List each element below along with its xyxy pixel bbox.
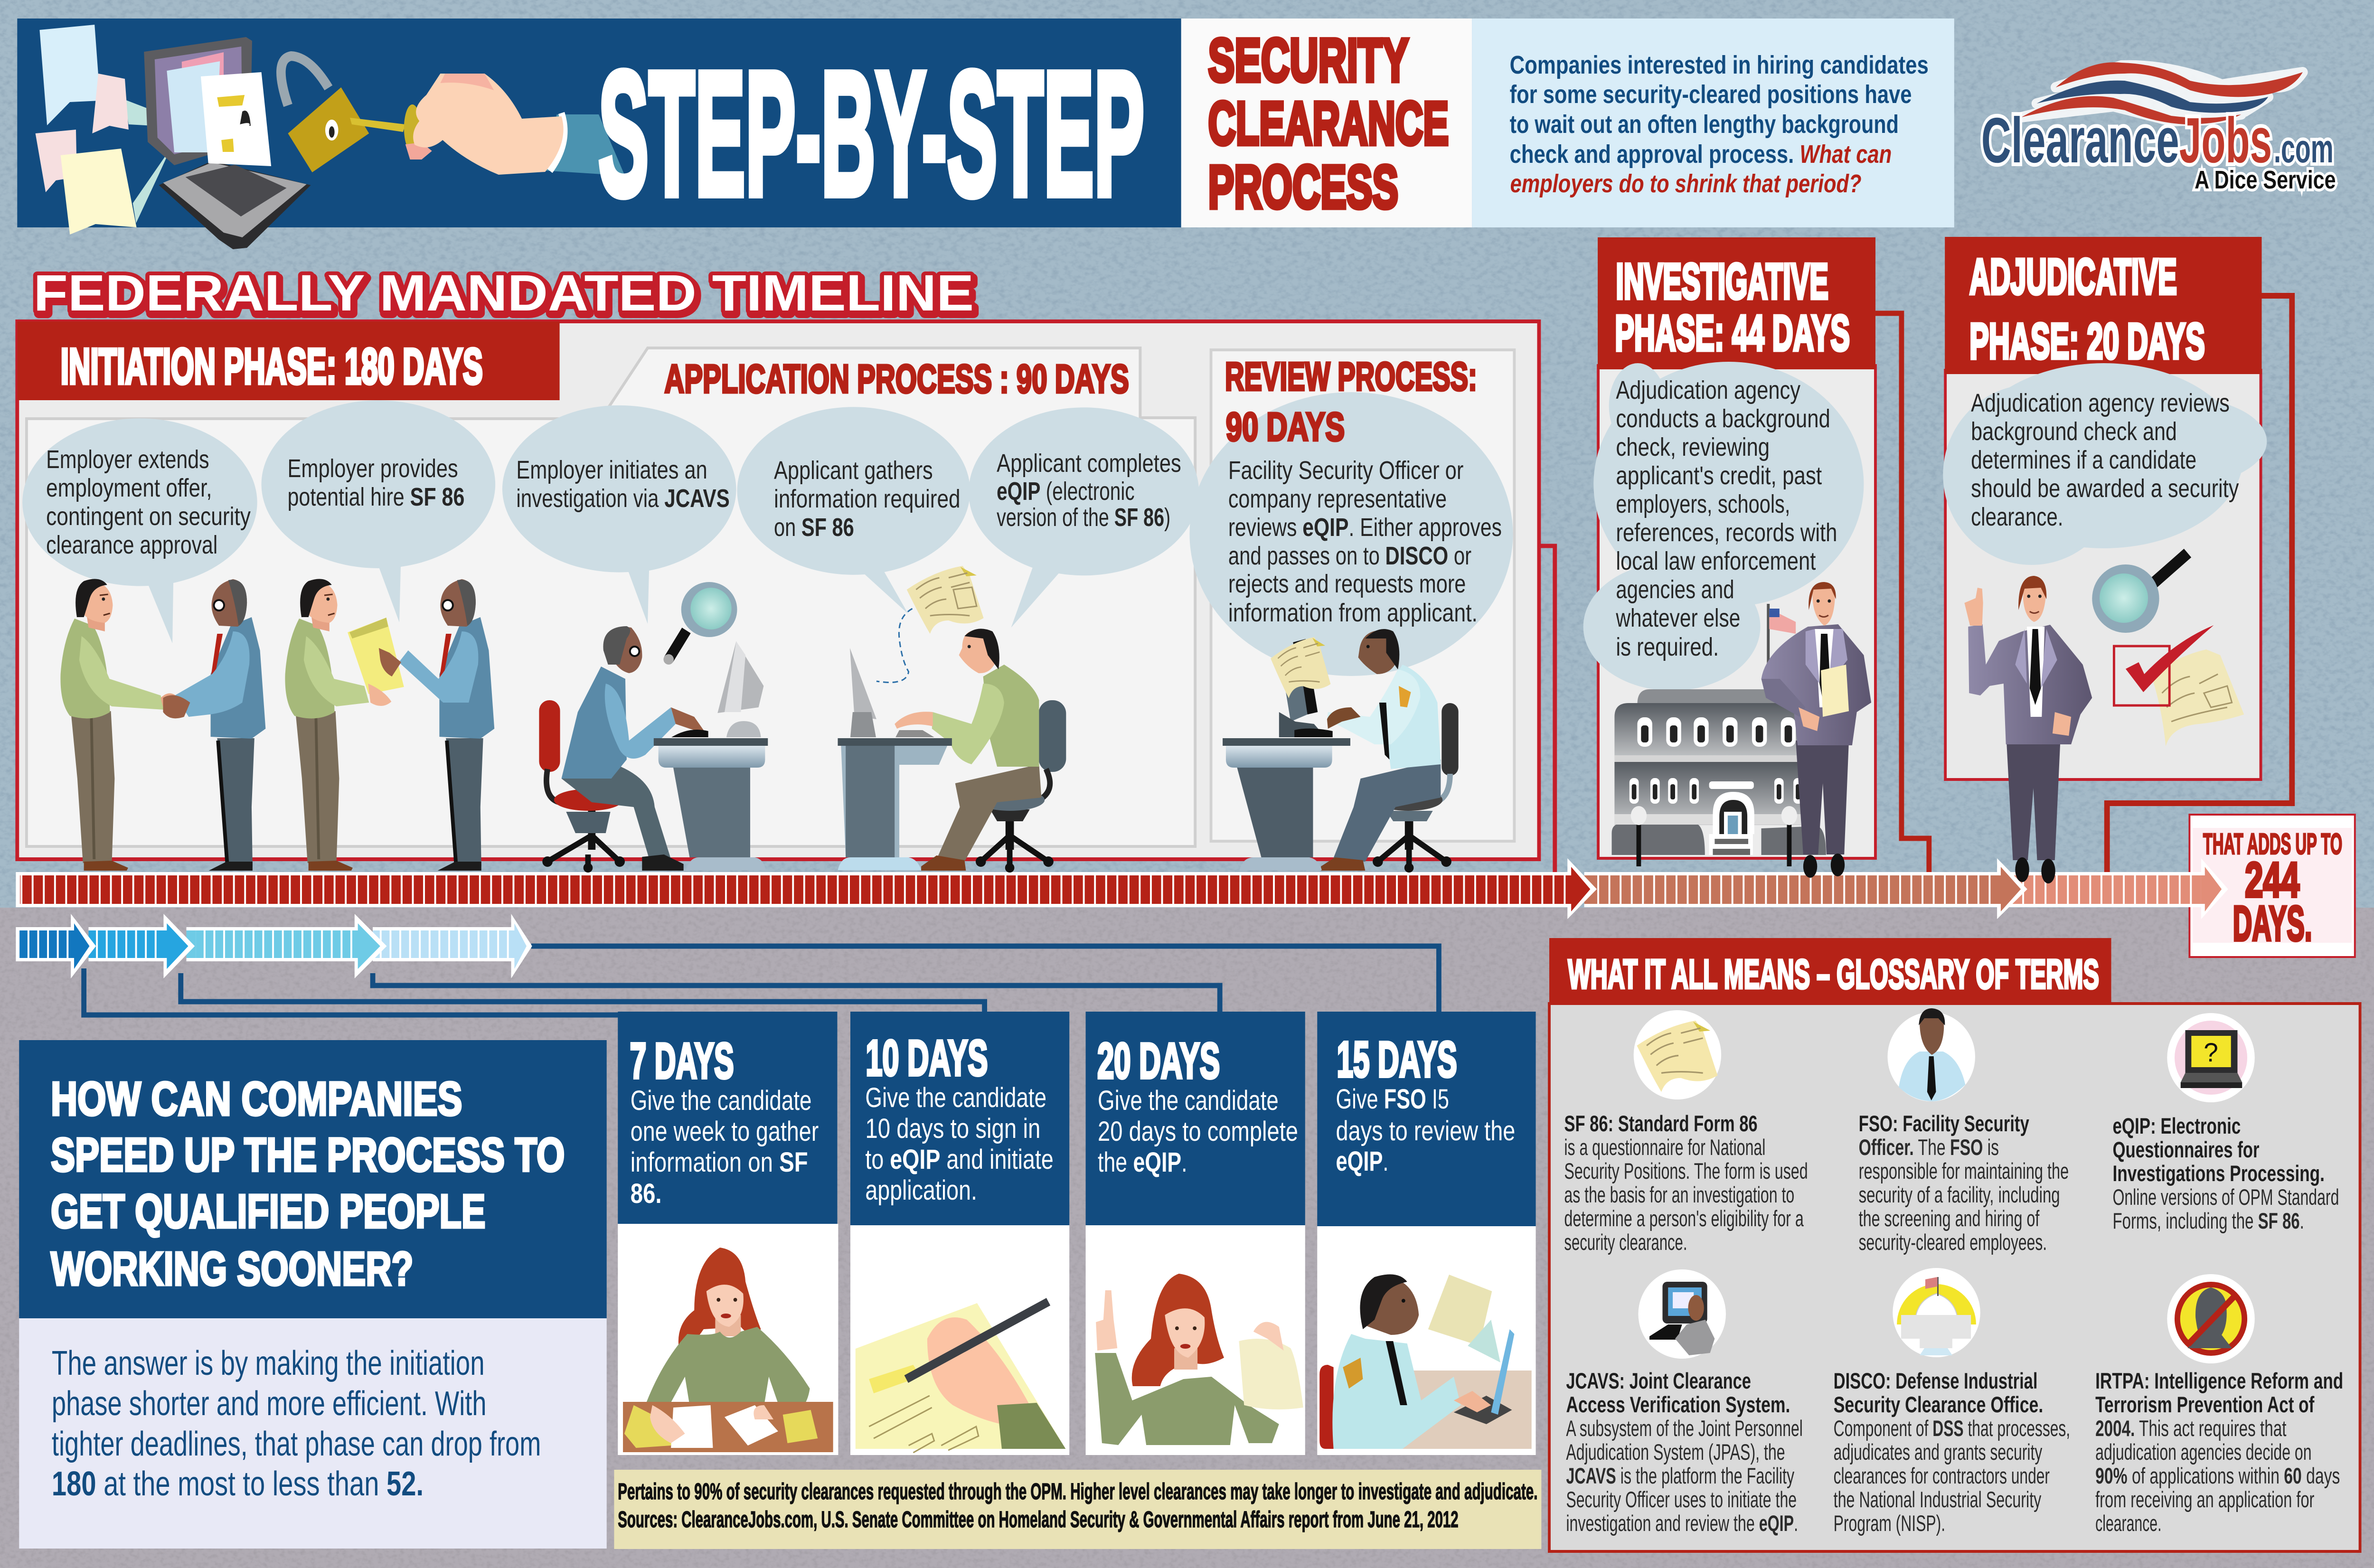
initiation phase heading: INITIATION PHASE: 180 DAYS (61, 338, 483, 394)
panel: investigative phase (1583, 237, 1875, 858)
arrow: 7 days (16, 914, 96, 978)
column: 10 days: to eQIP and initiate (865, 1145, 1054, 1175)
question heading: GET QUALIFIED PEOPLE (51, 1184, 486, 1238)
intro text: for some security-cleared positions have (1510, 81, 1912, 109)
icon: floating SF 86 document (907, 566, 984, 634)
adjudicative text (1971, 389, 2239, 531)
review process text: information from applicant. (1228, 599, 1478, 627)
glossary text: eQIP: Forms, including the SF 86. (2112, 1209, 2304, 1233)
panel: how can companies speed up (19, 1040, 607, 1549)
glossary text: JCAVS: A subsystem of the Joint Personnel (1566, 1416, 1803, 1441)
panel: glossary of terms (1549, 938, 2360, 1551)
glossary text: eQIP: eQIP: Electronic (2112, 1114, 2241, 1138)
logo: ClearanceJobs.com (1981, 62, 2336, 194)
investigative text: agencies and (1616, 576, 1734, 604)
column: 10 days (850, 1012, 1069, 1455)
review process heading: 90 DAYS (1226, 404, 1345, 449)
investigative text (1616, 376, 1837, 661)
connector line: investigative phase to timeline (1875, 313, 1929, 873)
icon: IRTPA no terrorism (2167, 1274, 2255, 1363)
investigative text: whatever else (1616, 604, 1740, 632)
timeline segment: initiation 180 days (16, 858, 1597, 919)
header intro panel (1472, 19, 1954, 227)
adjudicative text: should be awarded a security (1971, 475, 2239, 503)
glossary text: JCAVS: Access Verification System. (1566, 1392, 1790, 1417)
illustration: officer reviewing on laptop (1319, 1274, 1532, 1449)
icon: JCAVS workstation (1638, 1269, 1726, 1359)
dashed path: document to computer (876, 609, 912, 683)
column: 20 days: 20 DAYS (1097, 1033, 1220, 1089)
glossary text: JCAVS: investigation and review the eQIP. (1566, 1511, 1798, 1536)
adjudicative text: background check and (1971, 418, 2177, 446)
intro text: Companies interested in hiring candidates (1510, 51, 1929, 79)
investigative heading: PHASE: 44 DAYS (1615, 305, 1850, 361)
review process text (1228, 457, 1502, 627)
heading: security clearance process: CLEARANCE (1208, 89, 1449, 157)
figure: facility security officer at desk (1223, 629, 1459, 873)
intro text: employers do to shrink that period? (1510, 170, 1862, 198)
speech bubble: applicant gathers information (737, 407, 970, 614)
header white panel (1181, 19, 1472, 227)
initiation phase heading (17, 321, 560, 400)
speech bubble: applicant completes eQIP: Applicant completes (997, 450, 1181, 478)
figure: employer handshake (60, 579, 179, 871)
glossary text: IRTPA: 90% of applications within 60 days (2095, 1464, 2340, 1488)
glossary text: JCAVS: Adjudication System (JPAS), the (1566, 1440, 1785, 1465)
column: 10 days: application. (865, 1175, 977, 1206)
speech bubble: employer extends offer: Employer extends (46, 446, 209, 474)
arrow: 15 days (373, 914, 532, 978)
glossary text: DISCO: DISCO: Defense Industrial (1834, 1369, 2037, 1393)
intro text: check and approval process. What can (1510, 141, 1892, 169)
speech bubble: employer provides SF 86 (262, 400, 495, 622)
speech bubble: employer initiates investigation: investigation via JCAVS (516, 485, 730, 513)
section title: federally mandated timeline: FEDERALLY MANDATED TIMELINE (36, 267, 976, 324)
icon: magnifying glass (663, 582, 737, 665)
investigative text: check, reviewing (1616, 433, 1770, 461)
answer text: phase shorter and more efficient. With (52, 1384, 487, 1423)
figure: applicant at desk (838, 629, 1066, 873)
sources note (614, 1470, 1541, 1549)
question heading: SPEED UP THE PROCESS TO (51, 1128, 565, 1181)
review process panel (1211, 350, 1514, 841)
answer text (52, 1344, 541, 1503)
column: 15 days: days to review the (1336, 1116, 1515, 1146)
speech bubble: applicant completes eQIP (969, 407, 1199, 628)
speech bubble: employer initiates investigation (502, 405, 736, 624)
glossary text: JCAVS (1566, 1369, 1803, 1536)
investigative heading: INVESTIGATIVE (1616, 254, 1828, 310)
adjudicative text: clearance. (1971, 503, 2063, 531)
column: 10 days: 10 days to sign in (865, 1114, 1040, 1144)
sources note: Sources: ClearanceJobs.com, U.S. Senate Committee on Homeland Security & Governmental Affairs report from June 21, 2012 (618, 1507, 1459, 1532)
column: 15 days: eQIP. (1336, 1146, 1388, 1177)
speech bubble: applicant gathers information: Applicant gathers (774, 457, 933, 485)
glossary text: SF 86: determine a person's eligibility for a (1564, 1206, 1804, 1231)
section title: federally mandated timeline: FEDERALLY MANDATED TIMELINE (34, 264, 974, 321)
glossary text: DISCO: the National Industrial Security (1834, 1487, 2042, 1512)
investigative text: local law enforcement (1616, 547, 1816, 575)
glossary text: DISCO: Security Clearance Office. (1834, 1392, 2043, 1417)
glossary text: SF 86: SF 86: Standard Form 86 (1564, 1111, 1758, 1136)
timeline segment: investigative 44 days (1584, 858, 2027, 919)
investigative text: conducts a background (1616, 405, 1830, 433)
review process text: rejects and requests more (1228, 570, 1466, 598)
investigative heading (1598, 237, 1875, 369)
investigative text: is required. (1616, 633, 1719, 661)
glossary text: SF 86: security clearance. (1564, 1230, 1687, 1255)
column: 7 days: Give the candidate (631, 1086, 812, 1116)
header banner (17, 19, 2336, 249)
main timeline arrow bar (16, 858, 2228, 919)
illustration: woman with thumb up and form (1095, 1274, 1303, 1445)
timeline segment: adjudicative 20 days (2004, 858, 2228, 919)
question heading: HOW CAN COMPANIES (51, 1072, 462, 1125)
investigative text: employers, schools, (1616, 490, 1790, 518)
glossary text: FSO: security of a facility, including (1859, 1183, 2060, 1207)
glossary text: FSO: security-cleared employees. (1859, 1230, 2047, 1255)
panel: adjudicative phase (1943, 237, 2267, 779)
glossary text: FSO: the screening and hiring of (1859, 1206, 2039, 1231)
glossary text: JCAVS: Security Officer uses to initiate the (1566, 1487, 1797, 1512)
glossary text: SF 86 (1564, 1111, 1808, 1255)
adjudicative heading: PHASE: 20 DAYS (1969, 313, 2205, 369)
icon: facility security officer (1887, 1008, 1975, 1101)
callout: that adds up to 244 days: 244 (2245, 852, 2299, 907)
logo: ClearanceJobs.com: .com (2274, 126, 2334, 171)
speech bubble: applicant completes eQIP: version of the SF 86) (997, 504, 1170, 532)
column: 10 days: Give the candidate (865, 1083, 1046, 1113)
glossary text: SF 86: Security Positions. The form is used (1564, 1159, 1808, 1183)
review process heading: REVIEW PROCESS: (1225, 354, 1477, 399)
column: 20 days: the eQIP. (1098, 1147, 1187, 1178)
speech bubble: employer provides SF 86: potential hire SF 86 (287, 483, 464, 511)
column: 7 days: information on SF (631, 1147, 808, 1178)
intro text (1510, 51, 1929, 198)
intro text: to wait out an often lengthy background (1510, 111, 1899, 139)
speech bubble: applicant gathers information: information required (774, 485, 961, 513)
arrow: 20 days (187, 914, 387, 978)
glossary text: DISCO: adjudicates and grants security (1834, 1440, 2043, 1465)
blue connector lines (84, 946, 1439, 1015)
column: 20 days (1086, 1012, 1305, 1455)
glossary heading (1549, 938, 2111, 1004)
speech bubble: employer extends offer (22, 418, 257, 643)
review process text: reviews eQIP. Either approves (1228, 514, 1502, 542)
logo: ClearanceJobs.com: Clearance (1981, 105, 2179, 176)
header navy band (17, 19, 1181, 227)
icon: magnifying glass and approved document (2092, 553, 2244, 746)
investigative speech bubble (1583, 362, 1864, 691)
glossary text: SF 86: is a questionnaire for National (1564, 1135, 1765, 1160)
application process panel (27, 348, 1195, 846)
heading: security clearance process: SECURITY (1208, 26, 1409, 94)
illustration: woman sorting papers (623, 1248, 833, 1452)
adjudicative heading (1945, 237, 2261, 374)
column: 10 days: 10 DAYS (866, 1030, 988, 1086)
column: 7 days: 86. (631, 1179, 662, 1209)
icon: SF 86 form (1634, 1010, 1721, 1099)
figure: employer at desk (539, 626, 768, 873)
glossary text: JCAVS: JCAVS is the platform the Facility (1566, 1464, 1795, 1488)
figure: candidate receives folder (379, 579, 494, 871)
investigative text: references, records with (1616, 519, 1837, 547)
glossary text: FSO: Officer. The FSO is (1859, 1135, 1999, 1160)
glossary text: IRTPA (2095, 1369, 2343, 1536)
glossary text: IRTPA: Terrorism Prevention Act of (2095, 1392, 2315, 1417)
question heading (51, 1072, 565, 1295)
review process text: company representative (1228, 485, 1447, 513)
figure: investigator in purple suit (1762, 582, 1871, 878)
adjudicative heading: ADJUDICATIVE (1969, 249, 2177, 305)
connector line: initiation phase to timeline (1539, 546, 1555, 873)
speech bubble: applicant gathers information: on SF 86 (774, 514, 854, 542)
figure: candidate handshake (163, 579, 265, 871)
review process text: and passes on to DISCO or (1228, 542, 1471, 570)
question heading: WORKING SOONER? (51, 1242, 413, 1295)
logo: ClearanceJobs.com: A Dice Service (2195, 166, 2336, 194)
review process text: Facility Security Officer or (1228, 457, 1463, 485)
icon: eQIP laptop: ? (2204, 1038, 2218, 1067)
review process heading (1225, 354, 1477, 449)
logo: ClearanceJobs.com: Jobs (2179, 105, 2272, 176)
column: 7 days (618, 1012, 838, 1455)
adjudicative text: Adjudication agency reviews (1971, 389, 2230, 417)
glossary text: DISCO (1834, 1369, 2070, 1536)
icon: eQIP laptop (2167, 1013, 2255, 1102)
column: 20 days: Give the candidate (1098, 1086, 1279, 1116)
column: 7 days: one week to gather (631, 1117, 819, 1147)
glossary text: SF 86: as the basis for an investigation to (1564, 1183, 1794, 1207)
column: 15 days: Give FSO I5 (1336, 1084, 1449, 1115)
glossary text: FSO: FSO: Facility Security (1859, 1111, 2029, 1136)
glossary text: eQIP (2112, 1114, 2339, 1233)
speech bubble: review process (1189, 392, 1513, 676)
illustration: government building with flag (1612, 604, 1826, 866)
answer text: The answer is by making the initiation (52, 1344, 485, 1382)
short timeline arrow bar (16, 914, 532, 978)
glossary text: DISCO: Program (NISP). (1834, 1511, 1945, 1536)
column: 7 days: 7 DAYS (630, 1033, 734, 1089)
investigative text: Adjudication agency (1616, 376, 1800, 404)
connector line: adjudicative phase to timeline (2107, 296, 2292, 873)
speech bubble: employer extends offer: clearance approval (46, 531, 217, 559)
glossary text: FSO: responsible for maintaining the (1859, 1159, 2069, 1183)
glossary text: DISCO: clearances for contractors under (1834, 1464, 2050, 1488)
callout: that adds up to 244 days: DAYS. (2233, 896, 2312, 951)
glossary text: IRTPA: 2004. This act requires that (2095, 1416, 2287, 1441)
column: 15 days: 15 DAYS (1337, 1032, 1457, 1088)
speech bubble: employer extends offer: employment offer, (46, 474, 212, 502)
sources note: Pertains to 90% of security clearances requested through the OPM. Higher level clearances may take longer to investigate and adjudicate. (618, 1479, 1537, 1504)
speech bubble: applicant completes eQIP: eQIP (electronic (997, 478, 1135, 506)
illustration: hand signing form (856, 1302, 1065, 1453)
column: 20 days: 20 days to complete (1098, 1117, 1298, 1147)
glossary text: JCAVS: JCAVS: Joint Clearance (1566, 1369, 1751, 1393)
adjudicative text: determines if a candidate (1971, 446, 2196, 474)
callout: that adds up to 244 days (2189, 815, 2355, 957)
application process heading: APPLICATION PROCESS : 90 DAYS (664, 357, 1129, 401)
column: 15 days (1317, 1012, 1536, 1455)
arrow: 10 days (88, 914, 195, 978)
figure: employer hands over folder (285, 579, 404, 871)
glossary text: eQIP: Questionnaires for (2112, 1137, 2260, 1162)
panel: initiation phase (17, 321, 1539, 859)
speech bubble: employer initiates investigation: Employer initiates an (516, 456, 707, 484)
answer text: tighter deadlines, that phase can drop from (52, 1425, 541, 1463)
header banner: STEP-BY-STEP (598, 35, 1144, 233)
answer text: 180 at the most to less than 52. (52, 1465, 424, 1503)
adjudicative speech bubble (1943, 363, 2267, 565)
speech bubble: employer provides SF 86: Employer provides (287, 455, 458, 483)
glossary text: FSO (1859, 1111, 2069, 1255)
glossary text: IRTPA: clearance. (2095, 1511, 2162, 1536)
glossary text: DISCO: Component of DSS that processes, (1834, 1416, 2070, 1441)
speech bubble: employer extends offer: contingent on security (46, 503, 251, 531)
investigative text: applicant's credit, past (1616, 462, 1822, 490)
header illustration: laptop, documents, padlock and key hand (36, 25, 625, 249)
icon: DISCO capitol building (1893, 1268, 1980, 1357)
figure: adjudicator thumbs up (1964, 576, 2092, 883)
heading: security clearance process: PROCESS (1208, 153, 1398, 221)
heading: security clearance process (1208, 26, 1449, 221)
